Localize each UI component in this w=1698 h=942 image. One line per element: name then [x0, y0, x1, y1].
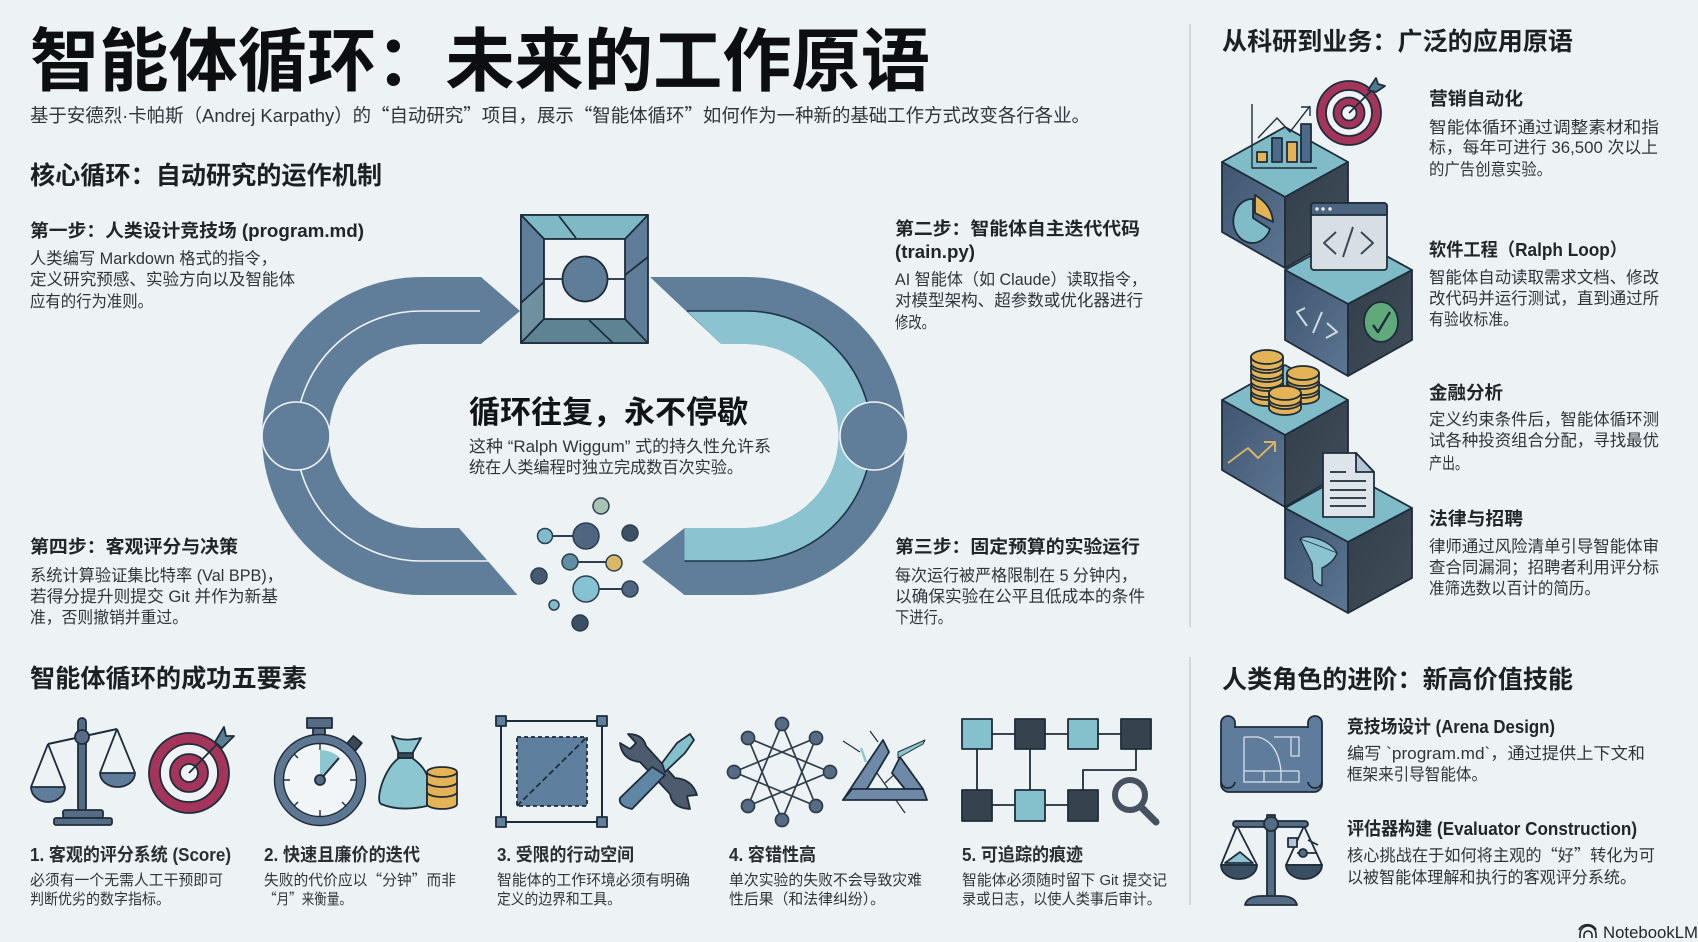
factor 2 text: 2. 快速且廉价的迭代: [264, 845, 420, 865]
factor 2 text: [264, 845, 456, 909]
text: legal and hiring: [1429, 509, 1659, 598]
title: 智能体循环：未来的工作原语: [30, 23, 930, 100]
factor 2 text: “月”来衡量。: [264, 888, 352, 909]
step 4 text: 系统计算验证集比特率 (Val BPB)，: [30, 566, 283, 585]
icon: commit trail: [962, 719, 1151, 821]
panel: applications: [1222, 27, 1659, 613]
icon: target large: [149, 727, 234, 813]
NotebookLM badge: NotebookLM: [1603, 923, 1698, 942]
icon: wrench and screwdriver: [620, 734, 697, 809]
text: evaluator construction: 核心挑战在于如何将主观的“好”转化为可: [1347, 842, 1655, 866]
text: marketing automation: 的广告创意实验。: [1429, 160, 1552, 179]
text: evaluator construction: 评估器构建 (Evaluator Construction): [1347, 819, 1637, 839]
step 1 text: 第一步：人类设计竞技场 (program.md): [30, 220, 364, 241]
text: finance: [1429, 382, 1659, 473]
icon: sandbox frame: [496, 716, 607, 827]
text: marketing automation: [1429, 88, 1659, 179]
panel: core loop: [30, 162, 1147, 631]
text: evaluator construction: [1347, 819, 1655, 887]
icon: experiment dots: [531, 498, 638, 631]
loop arrow: left: [262, 277, 520, 595]
factor 3 text: 3. 受限的行动空间: [497, 844, 634, 865]
factor 4 text: [729, 844, 922, 908]
heading: applications: 从科研到业务：广泛的应用原语: [1222, 27, 1573, 56]
icon: arena square: [521, 215, 648, 343]
text: software engineering: 智能体自动读取需求文档、修改: [1429, 268, 1659, 287]
factor 3 text: 智能体的工作环境必须有明确: [497, 871, 690, 889]
text: arena design: 框架来引导智能体。: [1347, 765, 1487, 784]
step 4 text: 若得分提升则提交 Git 并作为新基: [30, 587, 278, 606]
step 3 text: 每次运行被严格限制在 5 分钟内，: [895, 566, 1137, 585]
factor 1 text: 1. 客观的评分系统 (Score): [30, 844, 231, 865]
factor 1 text: 判断优劣的数字指标。: [30, 891, 170, 908]
step 1 text: 应有的行为准则。: [30, 292, 153, 311]
center message: 循环往复，永不停歇: [469, 395, 748, 430]
step 4 text: [30, 536, 283, 627]
icon: target: [1317, 78, 1385, 145]
step 1 text: [30, 220, 364, 311]
loop arrow: right: [642, 277, 908, 595]
text: legal and hiring: 查合同漏洞；招聘者利用评分标: [1429, 558, 1659, 577]
icon: code window: [1311, 203, 1387, 270]
text: finance: 产出。: [1429, 454, 1468, 473]
factor 5 text: [962, 844, 1167, 908]
text: arena design: 竞技场设计 (Arena Design): [1347, 716, 1555, 737]
step 2 text: 修改。: [895, 313, 935, 332]
step 1 text: 定义研究预感、实验方向以及智能体: [30, 270, 296, 289]
text: software engineering: 改代码并运行测试，直到通过所: [1429, 289, 1659, 308]
step 3 text: 以确保实验在公平且低成本的条件: [895, 587, 1145, 606]
factor 3 text: 定义的边界和工具。: [497, 891, 621, 908]
step 2 text: [895, 218, 1147, 332]
center message: 这种 “Ralph Wiggum” 式的持久性允许系: [469, 437, 771, 456]
text: marketing automation: 智能体循环通过调整素材和指: [1429, 118, 1659, 137]
text: finance: 定义约束条件后，智能体循环测: [1429, 410, 1659, 429]
factor 4 text: 性后果（和法律纠纷）。: [729, 891, 885, 908]
factor 5 text: 5. 可追踪的痕迹: [962, 844, 1083, 865]
step 1 text: 人类编写 Markdown 格式的指令，: [30, 249, 277, 268]
factor 5 text: 录或日志，以使人类事后审计。: [962, 891, 1161, 908]
factor 4 text: 4. 容错性高: [729, 844, 816, 865]
text: legal and hiring: 律师通过风险清单引导智能体审: [1429, 537, 1659, 556]
icon: blueprint: [1221, 716, 1322, 792]
factor 2 text: 失败的代价应以“分钟”而非: [264, 869, 456, 890]
factor 1 text: 必须有一个无需人工干预即可: [30, 872, 223, 889]
heading: human roles: 人类角色的进阶：新高价值技能: [1222, 666, 1573, 694]
text: software engineering: 有验收标准。: [1429, 310, 1518, 329]
cube: marketing: [1222, 104, 1348, 268]
step 2 text: (train.py): [895, 242, 975, 262]
text: marketing automation: 营销自动化: [1429, 88, 1523, 109]
cube: legal: [1285, 473, 1412, 613]
center message: [469, 395, 771, 477]
heading: success factors: 智能体循环的成功五要素: [30, 665, 307, 693]
step 3 text: [895, 536, 1145, 627]
factor 5 text: 智能体必须随时留下 Git 提交记: [962, 871, 1167, 889]
text: arena design: [1347, 716, 1645, 784]
text: software engineering: 软件工程（Ralph Loop）: [1429, 240, 1627, 260]
factor 3 text: [497, 844, 690, 908]
cube: finance: [1222, 365, 1348, 507]
step 4 text: 准，否则撤销并重过。: [30, 608, 188, 627]
panel: five success factors: [30, 665, 1167, 909]
text: marketing automation: 标，每年可进行 36,500 次以上: [1429, 138, 1658, 157]
step 2 text: 第二步：智能体自主迭代代码: [895, 218, 1140, 239]
text: finance: 试各种投资组合分配，寻找最优: [1429, 431, 1659, 450]
factor 1 text: [30, 844, 231, 908]
factor 4 text: 单次实验的失败不会导致灾难: [729, 872, 922, 889]
text: legal and hiring: 法律与招聘: [1429, 509, 1523, 529]
step 4 text: 第四步：客观评分与决策: [30, 536, 238, 557]
step 2 text: 对模型架构、超参数或优化器进行: [895, 291, 1143, 310]
text: finance: 金融分析: [1429, 382, 1503, 403]
icon: scales: [31, 718, 135, 825]
icon: money bag and coins: [379, 736, 457, 809]
cube: software: [1285, 235, 1412, 376]
panel: human roles: [1221, 666, 1655, 905]
step 3 text: 第三步：固定预算的实验运行: [895, 536, 1140, 557]
subtitle: 基于安德烈·卡帕斯（Andrej Karpathy）的“自动研究”项目，展示“智能体循环”如何作为一种新的基础工作方式改变各行各业。: [30, 102, 1090, 128]
icon: magnifier: [1115, 780, 1156, 822]
icon: coin stacks: [1251, 350, 1319, 415]
icon: star network: [728, 718, 836, 826]
text: arena design: 编写 `program.md`，通过提供上下文和: [1347, 744, 1645, 763]
heading: core loop: 核心循环：自动研究的运作机制: [30, 162, 382, 190]
text: evaluator construction: 以被智能体理解和执行的客观评分系统。: [1347, 868, 1636, 887]
icon: stopwatch: [274, 718, 366, 826]
step 2 text: AI 智能体（如 Claude）读取指令，: [895, 270, 1147, 289]
text: software engineering: [1429, 240, 1659, 329]
center message: 统在人类编程时独立完成数百次实验。: [469, 458, 743, 477]
icon: broken triangle: [843, 731, 927, 813]
icon: evaluator scales: [1221, 815, 1322, 905]
step 3 text: 下进行。: [895, 608, 952, 627]
text: legal and hiring: 准筛选数以百计的简历。: [1429, 579, 1600, 598]
icon: document: [1323, 453, 1374, 517]
